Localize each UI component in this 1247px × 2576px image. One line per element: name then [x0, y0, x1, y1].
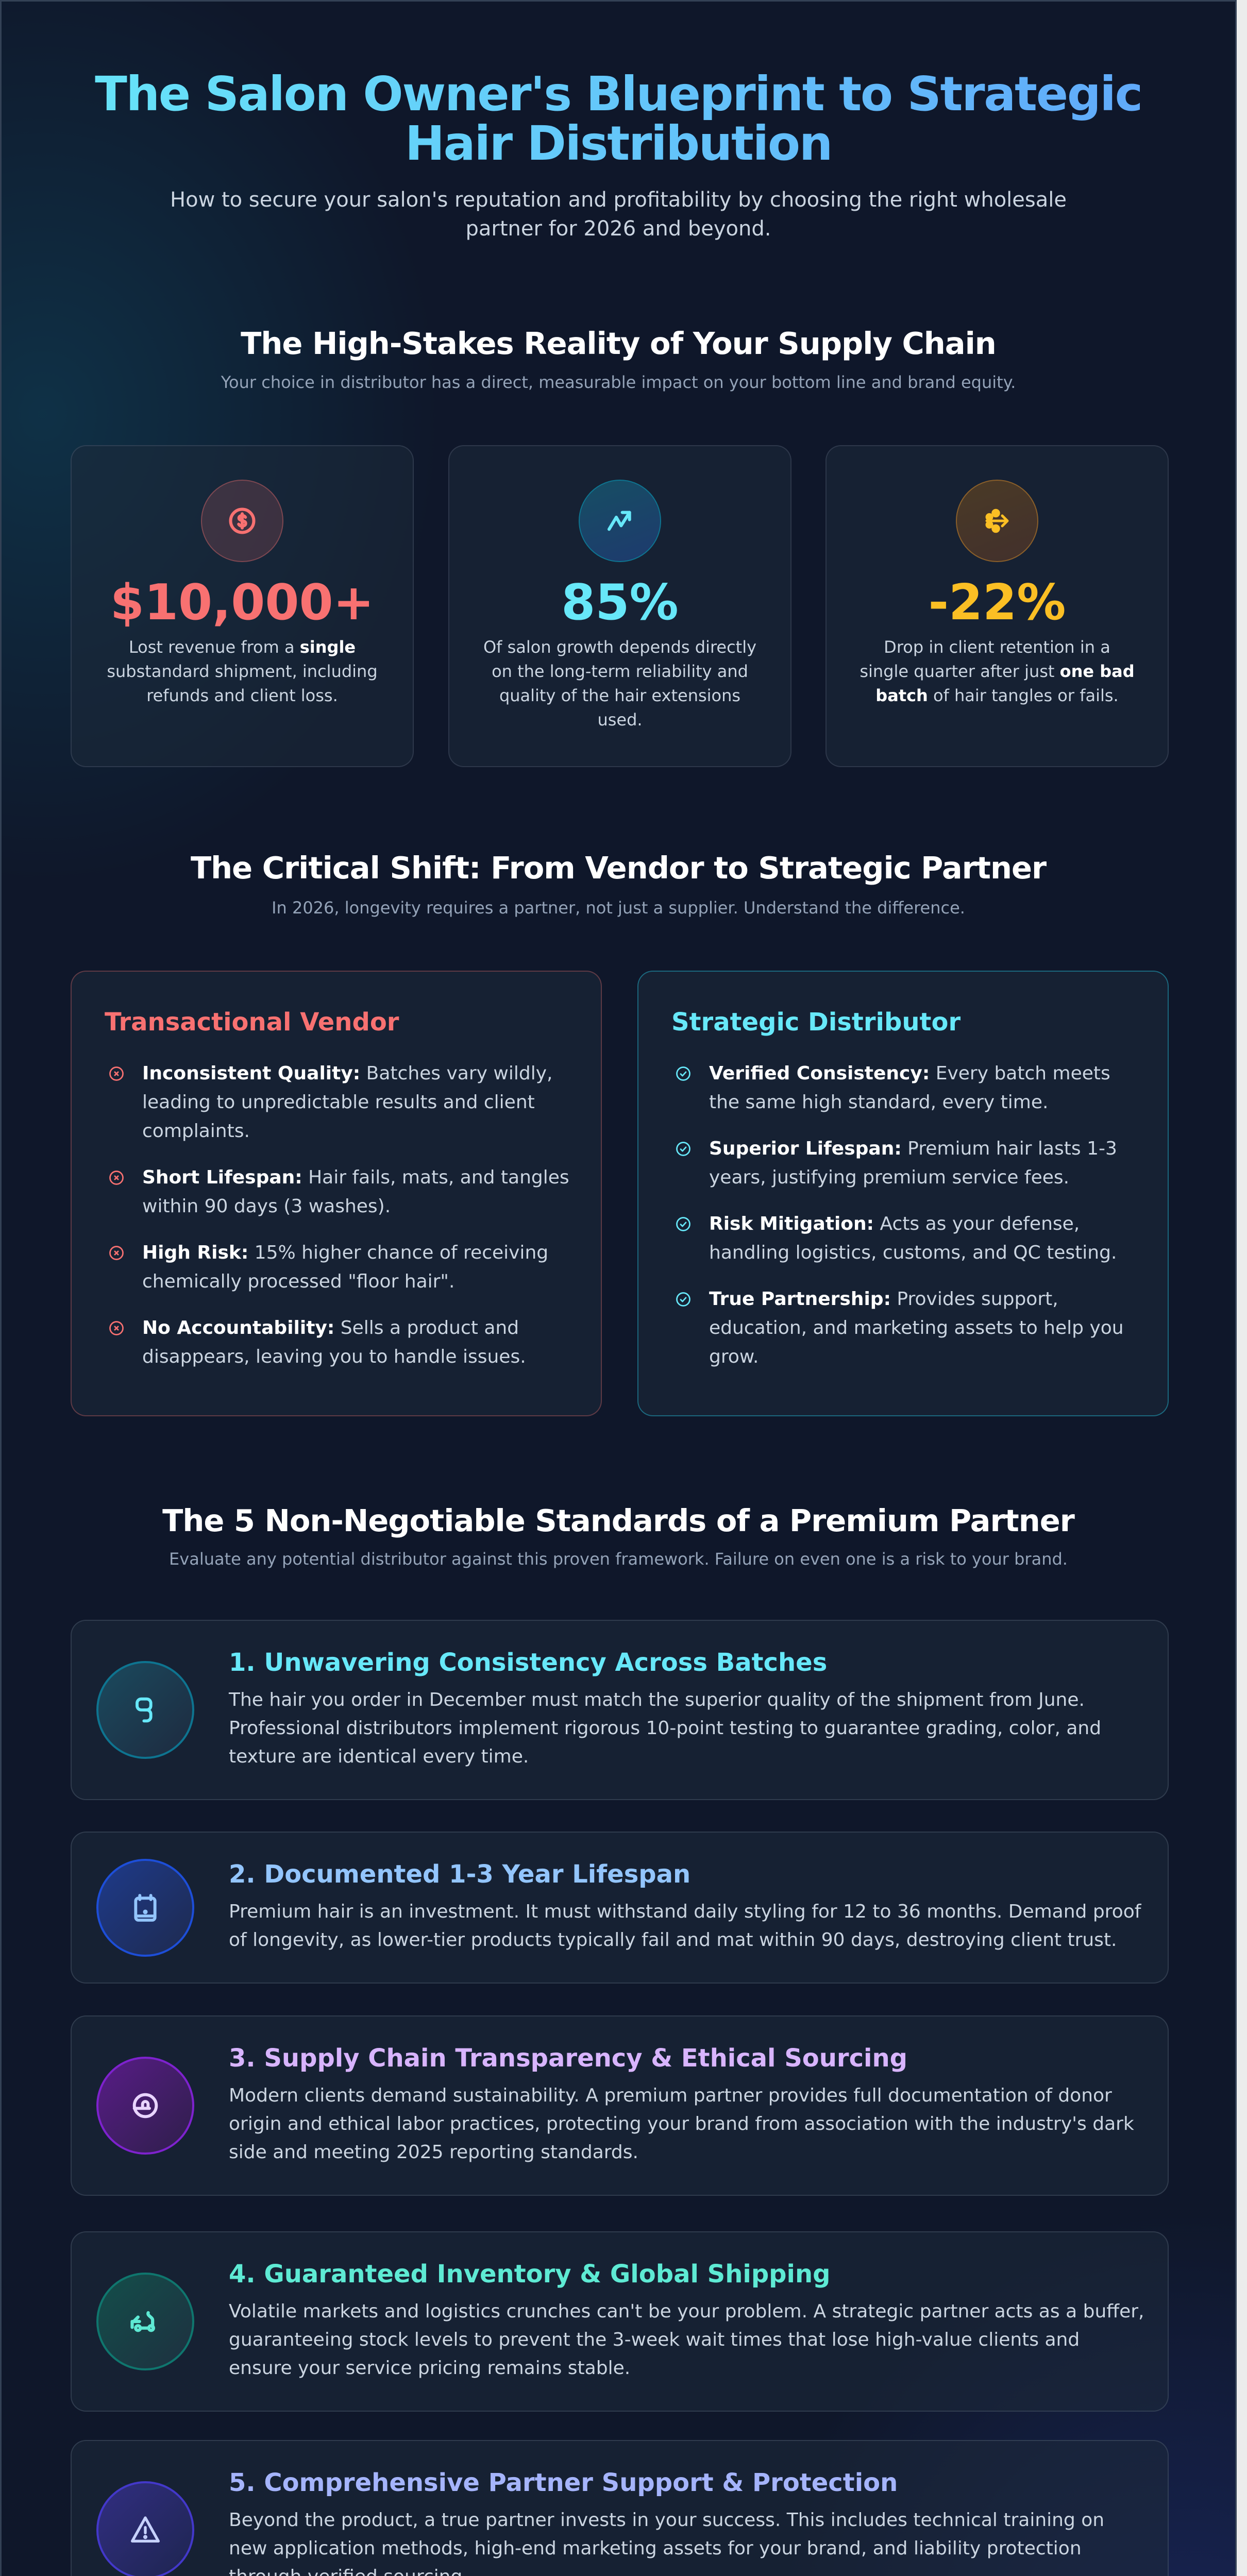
stat card: salon growth: [448, 445, 791, 767]
stat description: single quarter after just one bad: [860, 662, 1135, 681]
item: true partnership: grow.: [709, 1346, 759, 1367]
standard 2 text: [229, 1901, 1142, 1951]
standard 2 text: Premium hair is an investment. It must withstand daily styling for 12 to 36 months. Demand proof: [229, 1901, 1141, 1922]
standard 1 text: Professional distributors implement rigorous 10-point testing to guarantee grading, color, and: [229, 1718, 1101, 1739]
stat description: [107, 637, 378, 705]
standard 5 text: Beyond the product, a true partner invests in your success. This includes technical training on: [229, 2510, 1104, 2531]
subtitle: [170, 188, 1067, 241]
item: inconsistent quality: [109, 1063, 552, 1142]
card: standard 3 transparency: [71, 2015, 1169, 2196]
stat description: on the long-term reliability and: [492, 662, 748, 681]
standard 3 text: side and meeting 2025 reporting standards.: [229, 2142, 638, 2163]
item: true partnership: True Partnership: Provides support,: [709, 1289, 1058, 1310]
standard 1 text: texture are identical every time.: [229, 1746, 529, 1767]
stat number: -22%: [929, 574, 1066, 631]
stat number: 85%: [561, 574, 679, 631]
standard 3 text: origin and ethical labor practices, protecting your brand from association with the industry's dark: [229, 2113, 1134, 2134]
heading: critical shift: The Critical Shift: From Vendor to Strategic Partner: [191, 850, 1046, 886]
item: no accountability: No Accountability: Sells a product and: [142, 1317, 519, 1338]
standard 1 text: The hair you order in December must match the superior quality of the shipment from June.: [229, 1689, 1085, 1710]
item: superior lifespan: [676, 1138, 1117, 1188]
standard 5 text: new application methods, high-end marketing assets for your brand, and liability protection: [229, 2538, 1082, 2559]
item: inconsistent quality: Inconsistent Quality: Batches vary wildly,: [142, 1063, 552, 1084]
item: inconsistent quality: leading to unpredictable results and client: [142, 1092, 535, 1113]
item: short lifespan: Short Lifespan: Hair fails, mats, and tangles: [142, 1167, 569, 1188]
title: [2, 70, 1235, 168]
stat number: $10,000+: [110, 574, 374, 631]
icon: lock: [96, 2057, 194, 2155]
standard 5 title: 5. Comprehensive Partner Support & Protection: [229, 2468, 898, 2497]
item: superior lifespan: Superior Lifespan: Premium hair lasts 1-3: [709, 1138, 1117, 1159]
stat description: used.: [597, 710, 643, 730]
stat description: refunds and client loss.: [146, 686, 338, 705]
item: no accountability: disappears, leaving you to handle issues.: [142, 1346, 526, 1367]
standard 3 text: Modern clients demand sustainability. A premium partner provides full documentation of donor: [229, 2085, 1112, 2106]
panel: strategic distributor: [637, 971, 1169, 1416]
item: verified consistency: the same high standard, every time.: [709, 1092, 1048, 1113]
stat description: [483, 637, 756, 730]
stat description: batch of hair tangles or fails.: [875, 686, 1119, 705]
icon: trend up: [579, 480, 661, 562]
title: Hair Distribution: [405, 116, 832, 171]
title: The Salon Owner's Blueprint to Strategic: [95, 66, 1142, 122]
item: risk mitigation: Risk Mitigation: Acts as your defense,: [709, 1213, 1080, 1234]
standard 4 text: ensure your service pricing remains stable.: [229, 2358, 630, 2379]
stat description: substandard shipment, including: [107, 662, 378, 681]
standard 1 text: [229, 1689, 1101, 1767]
item: true partnership: education, and marketing assets to help you: [709, 1317, 1124, 1338]
column heading: distributor: Strategic Distributor: [671, 1008, 960, 1037]
heading: high-stakes reality: The High-Stakes Reality of Your Supply Chain: [241, 326, 996, 361]
stat description: Drop in client retention in a: [884, 637, 1110, 657]
standard 4 text: [229, 2301, 1144, 2379]
item: risk mitigation: [676, 1213, 1117, 1263]
card: standard 4 inventory: [71, 2231, 1169, 2412]
standard 4 text: Volatile markets and logistics crunches can't be your problem. A strategic partner acts as a buffer,: [229, 2301, 1144, 2322]
heading: 5 standards: The 5 Non-Negotiable Standards of a Premium Partner: [162, 1503, 1074, 1538]
icon: link: [96, 1661, 194, 1759]
icon: calendar: [96, 1859, 194, 1957]
column heading: vendor: Transactional Vendor: [105, 1008, 399, 1037]
icon: truck: [96, 2273, 194, 2370]
subtitle: partner for 2026 and beyond.: [466, 217, 771, 241]
item: superior lifespan: years, justifying premium service fees.: [709, 1167, 1069, 1188]
item: high risk: High Risk: 15% higher chance of receiving: [142, 1242, 548, 1263]
subtitle: How to secure your salon's reputation and profitability by choosing the right wholesale: [170, 188, 1067, 212]
item: true partnership: [676, 1289, 1124, 1367]
standard 4 text: guaranteeing stock levels to prevent the 3-week wait times that lose high-value clients and: [229, 2329, 1080, 2350]
icon: split arrow: [956, 480, 1038, 562]
item: verified consistency: [676, 1063, 1110, 1113]
icon: dollar coin: [201, 480, 283, 562]
stat description: Of salon growth depends directly: [483, 637, 756, 657]
stat card: revenue loss: [71, 445, 414, 767]
item: inconsistent quality: complaints.: [142, 1121, 250, 1142]
item: high risk: [109, 1242, 548, 1292]
stat card: retention drop: [825, 445, 1169, 767]
card: standard 5 support: [71, 2440, 1169, 2576]
item: high risk: chemically processed "floor hair".: [142, 1271, 454, 1292]
standard 1 title: 1. Unwavering Consistency Across Batches: [229, 1648, 827, 1677]
item: short lifespan: [109, 1167, 569, 1217]
icon: warning triangle: [96, 2481, 194, 2576]
card: standard 2 lifespan: [71, 1832, 1169, 1984]
standard 2 title: 2. Documented 1-3 Year Lifespan: [229, 1860, 690, 1889]
item: short lifespan: within 90 days (3 washes).: [142, 1196, 391, 1217]
panel: transactional vendor: [71, 971, 602, 1416]
stat description: [860, 637, 1135, 705]
stat description: Lost revenue from a single: [129, 637, 356, 657]
subheading: high-stakes: Your choice in distributor has a direct, measurable impact on your bottom line and brand equity.: [221, 372, 1016, 392]
item: no accountability: [109, 1317, 526, 1367]
standard 3 text: [229, 2085, 1134, 2163]
stat description: quality of the hair extensions: [499, 686, 740, 705]
item: risk mitigation: handling logistics, customs, and QC testing.: [709, 1242, 1117, 1263]
subheading: critical shift: In 2026, longevity requires a partner, not just a supplier. Understand the difference.: [272, 898, 965, 918]
subheading: 5 standards: Evaluate any potential distributor against this proven framework. Failure on even one is a risk to your brand.: [169, 1549, 1068, 1569]
card: standard 1 consistency: [71, 1620, 1169, 1800]
standard 2 text: of longevity, as lower-tier products typically fail and mat within 90 days, destroying client trust.: [229, 1929, 1117, 1951]
standard 4 title: 4. Guaranteed Inventory & Global Shipping: [229, 2260, 831, 2289]
standard 3 title: 3. Supply Chain Transparency & Ethical Sourcing: [229, 2044, 907, 2073]
item: verified consistency: Verified Consistency: Every batch meets: [709, 1063, 1110, 1084]
standard 5 text: [229, 2510, 1104, 2576]
